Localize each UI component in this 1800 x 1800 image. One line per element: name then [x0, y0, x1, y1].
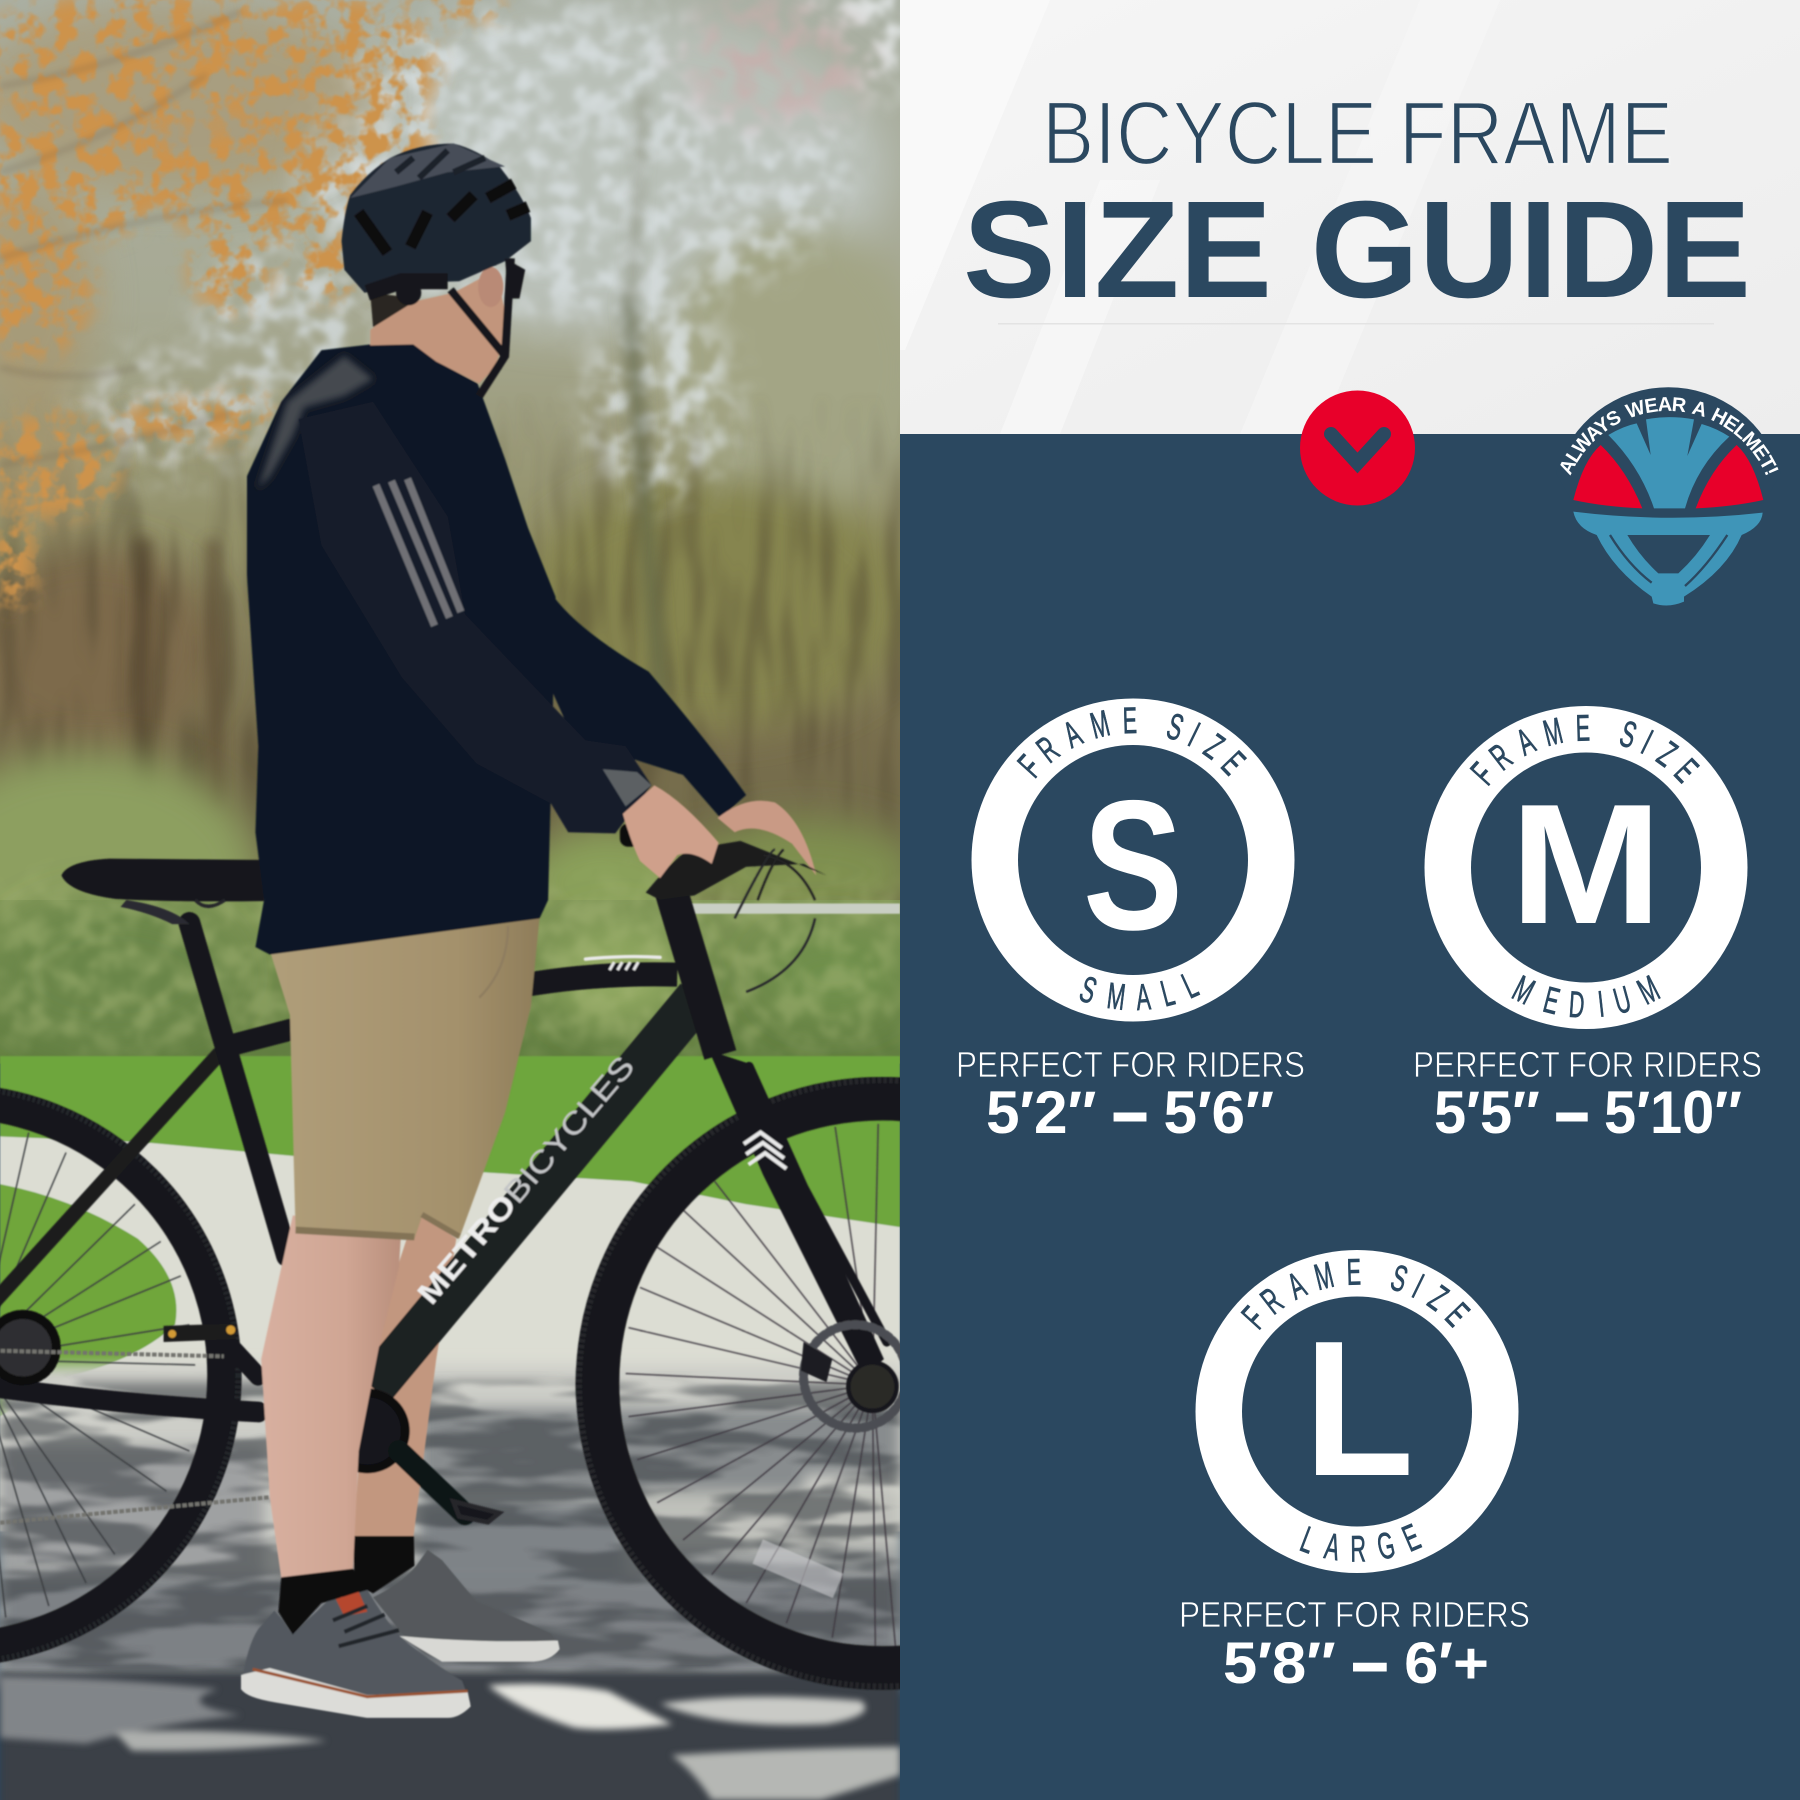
- badge curved label: frame size: Z: [1650, 735, 1684, 775]
- size text: medium: 5′5″ – 5′10″: [1434, 1079, 1742, 1146]
- photo: rider's rear arm and hands: [551, 597, 816, 875]
- badge curved label: frame size: [1235, 1253, 1476, 1337]
- panel: navy size guide: [900, 434, 1800, 1800]
- photo: orange autumn foliage: [0, 0, 505, 608]
- badge curved label: frame size: S: [1386, 1258, 1412, 1301]
- badge curved label: large: A: [1322, 1527, 1343, 1569]
- badge curved label: frame size: E: [1666, 752, 1705, 790]
- size text: small: 5′2″ – 5′6″: [986, 1079, 1274, 1146]
- icon: always wear a helmet badge: [1560, 387, 1778, 606]
- badge curved label: frame size: S: [1162, 706, 1188, 749]
- badge curved label: frame size: A: [1058, 714, 1089, 756]
- size text: small: PERFECT FOR RIDERS: [956, 1044, 1305, 1085]
- badge curved label: small: L: [1177, 965, 1204, 1007]
- badge curved label: frame size: M: [1540, 711, 1567, 755]
- badge curved label: frame size: R: [1030, 729, 1067, 771]
- badge curved label: frame size: [1464, 709, 1705, 793]
- badge curved label: small: A: [1135, 977, 1153, 1019]
- badge curved label: frame size: R: [1483, 737, 1520, 778]
- size badge: large: [1196, 1250, 1518, 1573]
- badge curved label: frame size: E: [1437, 1296, 1476, 1334]
- badge curved label: small: [1075, 965, 1204, 1019]
- badge curved label: frame size: E: [1122, 701, 1137, 742]
- badge curved label: medium: E: [1539, 980, 1563, 1023]
- photo: khaki shorts: [270, 917, 540, 1239]
- badge curved label: large: G: [1374, 1525, 1399, 1568]
- size badge: medium: M: [1510, 769, 1662, 960]
- panel: top white header: [900, 0, 1800, 434]
- photo background: blurred trees and sky: [0, 0, 900, 900]
- photo: bicycle brand text on down tube: METROBICYCLES: [410, 1049, 641, 1311]
- badge curved label: medium: [1506, 969, 1666, 1026]
- icon: red chevron button: [1300, 390, 1415, 506]
- photo: back leg: [353, 1210, 560, 1662]
- badge curved label: frame size: E: [1575, 709, 1590, 749]
- badge curved label: frame size: E: [1213, 745, 1252, 783]
- title: size guide: SIZE GUIDE: [963, 173, 1751, 327]
- photo: saddle: [61, 859, 264, 924]
- size badge: small: S: [1083, 763, 1183, 969]
- badge curved label: frame size: A: [1282, 1265, 1313, 1308]
- size text: small: [956, 1044, 1305, 1146]
- size badge: medium: [1424, 706, 1748, 1029]
- photo: neck and head: [370, 258, 511, 396]
- badge curved label: frame size: [1011, 701, 1252, 785]
- size text: large: 5′8″ – 6′+: [1223, 1631, 1489, 1696]
- badge curved label: frame size: I: [1182, 716, 1205, 755]
- badge curved label: frame size: I: [1406, 1267, 1429, 1306]
- photo: bicycle frame with crank and pedals: [0, 883, 907, 1523]
- badge curved label: small: M: [1105, 976, 1127, 1018]
- badge curved label: large: L: [1295, 1520, 1321, 1562]
- title divider: [998, 323, 1714, 324]
- badge curved label: frame size: M: [1087, 704, 1114, 747]
- badge curved label: frame size: S: [1615, 714, 1641, 757]
- size text: large: [1179, 1594, 1530, 1696]
- badge curved label: large: [1295, 1517, 1426, 1570]
- photo: grass, path and road: [0, 883, 901, 1800]
- photo: bicycle, rider and shoes: [0, 142, 900, 1719]
- badge curved label: frame size: A: [1511, 721, 1542, 764]
- badge curved label: medium: M: [1506, 969, 1540, 1013]
- badge curved label: frame size: M: [1311, 1255, 1338, 1299]
- photo: jacket sleeve stripes: [376, 479, 461, 626]
- photo: front hand and handlebar: [620, 785, 827, 992]
- photo: black rider jacket: [247, 344, 651, 955]
- badge curved label: small: L: [1157, 973, 1179, 1015]
- size text: medium: [1413, 1044, 1762, 1146]
- photo: front bicycle wheel: [574, 1076, 900, 1690]
- photo: rider standing with bicycle: [0, 0, 900, 1800]
- badge curved label: frame size: F: [1011, 748, 1050, 785]
- badge curved label: medium: D: [1567, 985, 1586, 1026]
- photo: rider's front leg and shoe: [241, 1216, 471, 1718]
- badge curved label: frame size: Z: [1197, 727, 1231, 768]
- title: bicycle frame: BICYCLE FRAME: [1042, 84, 1673, 184]
- badge curved label: small: S: [1075, 969, 1101, 1012]
- size text: large: PERFECT FOR RIDERS: [1179, 1594, 1530, 1635]
- badge curved label: medium: I: [1596, 985, 1606, 1025]
- badge curved label: frame size: I: [1635, 723, 1658, 762]
- icon: always wear a helmet badge: ALWAYS WEAR A HELMET!: [1560, 397, 1778, 476]
- badge curved label: medium: M: [1632, 969, 1666, 1013]
- badge curved label: large: R: [1350, 1530, 1366, 1570]
- badge curved label: frame size: F: [1464, 756, 1503, 793]
- size badge: small: [972, 698, 1294, 1022]
- photo: rear bicycle wheel: [0, 1087, 238, 1663]
- badge curved label: frame size: Z: [1421, 1279, 1455, 1319]
- badge curved label: frame size: E: [1346, 1253, 1361, 1293]
- photo: bicycle helmet: [342, 143, 531, 305]
- badge curved label: frame size: R: [1254, 1281, 1291, 1322]
- badge curved label: frame size: F: [1235, 1300, 1274, 1337]
- size badge: large: L: [1304, 1300, 1414, 1516]
- badge curved label: medium: U: [1610, 979, 1635, 1022]
- badge curved label: large: E: [1397, 1517, 1426, 1560]
